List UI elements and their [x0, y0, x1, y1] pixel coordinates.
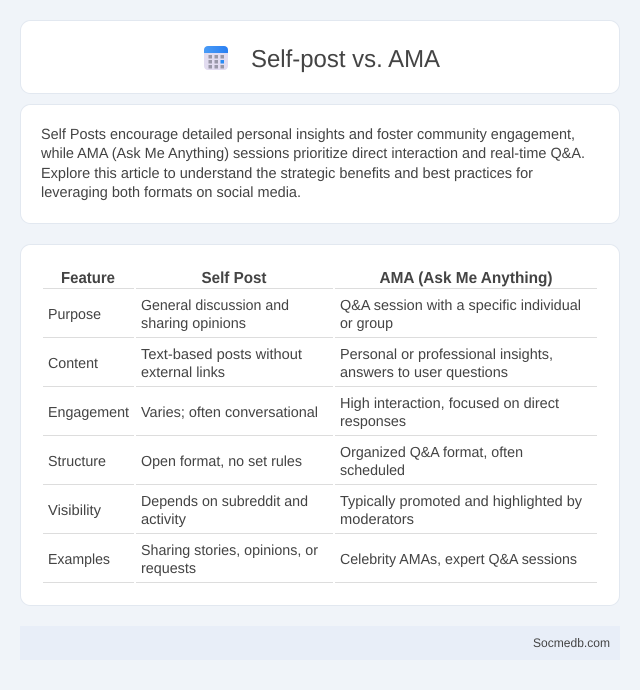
row: content: Content [48, 356, 98, 372]
row: examples [48, 543, 577, 577]
intro text: while AMA (Ask Me Anything) sessions prioritize direct interaction and real-time Q&A. [40, 146, 585, 162]
row: structure [48, 445, 523, 479]
row: visibility: moderators [340, 512, 414, 528]
row: purpose: or group [340, 316, 393, 332]
row: examples: Examples [48, 552, 110, 568]
intro text: Explore this article to understand the strategic benefits and best practices for [41, 166, 533, 182]
row: purpose: Purpose [48, 307, 101, 323]
row: purpose [48, 298, 581, 332]
intro text: leveraging both formats on social media. [41, 185, 301, 201]
row: visibility: Typically promoted and highlighted by [340, 494, 583, 510]
icon: calendar [204, 46, 228, 70]
row: content: Personal or professional insights, [340, 347, 553, 363]
row: examples: Celebrity AMAs, expert Q&A sessions [340, 552, 577, 568]
row: engagement [48, 396, 559, 430]
table header: Feature [61, 270, 115, 287]
panel: introduction [20, 104, 620, 224]
row: engagement: responses [340, 414, 406, 430]
row: content: answers to user questions [340, 365, 508, 381]
row: visibility [48, 494, 583, 528]
row: structure: Organized Q&A format, often [340, 445, 523, 461]
row: visibility: activity [141, 512, 187, 528]
row: examples: Sharing stories, opinions, or [141, 543, 318, 559]
row: content: external links [141, 365, 225, 381]
row: visibility: Visibility [48, 503, 102, 519]
row: content [48, 347, 553, 381]
intro text: Self Posts encourage detailed personal insights and foster community engagement, [41, 127, 575, 143]
row: engagement: Engagement [48, 405, 129, 421]
row: purpose: Q&A session with a specific individual [340, 298, 581, 314]
table header: AMA (Ask Me Anything) [380, 270, 552, 287]
table header [61, 270, 552, 287]
panel: title card [20, 20, 620, 94]
title: Self-post vs. AMA [251, 46, 441, 73]
row: purpose: sharing opinions [141, 316, 246, 332]
row: examples: requests [141, 561, 196, 577]
row: visibility: Depends on subreddit and [141, 494, 308, 510]
intro text [40, 127, 585, 201]
row: structure: Structure [48, 454, 106, 470]
footer credit: Socmedb.com [533, 636, 610, 650]
row: engagement: Varies; often conversational [141, 405, 318, 421]
row: structure: scheduled [340, 463, 405, 479]
row: content: Text-based posts without [141, 347, 302, 363]
row: engagement: High interaction, focused on direct [340, 396, 559, 412]
row: structure: Open format, no set rules [141, 454, 302, 470]
panel: comparison table [20, 244, 620, 606]
table header: Self Post [202, 270, 267, 287]
row: purpose: General discussion and [141, 298, 289, 314]
footer bar [20, 626, 620, 660]
